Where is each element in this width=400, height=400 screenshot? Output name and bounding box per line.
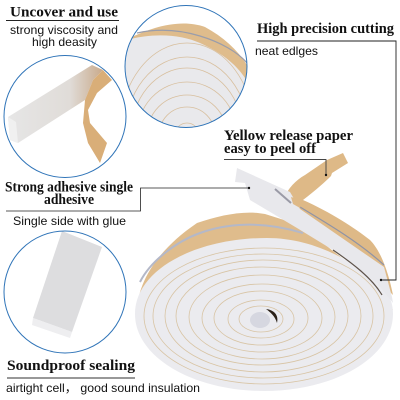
roll: white foam face (135, 238, 393, 391)
leader line: precision (257, 41, 396, 280)
circle: magnified roll edge (124, 5, 248, 128)
product: foam tape roll (135, 153, 393, 391)
text: strong viscosity: strong viscosity and (10, 23, 118, 37)
heading: easy to peel: easy to peel off (224, 141, 316, 157)
heading: high precision: High precision cutting (257, 21, 395, 37)
heading: soundproof: Soundproof sealing (7, 358, 136, 374)
rising tape: tan release paper (283, 153, 393, 295)
leader line: adhesive (6, 188, 249, 211)
leader line: release paper (224, 160, 326, 175)
rising tape: white foam strip (235, 168, 393, 303)
roll: centre hole (250, 312, 270, 328)
heading: yellow release paper: Yellow release paper (224, 128, 354, 144)
heading: strong adhesive: Strong adhesive single (5, 180, 134, 196)
text: single side: Single side with glue (13, 214, 126, 228)
circle: strip with peeled paper (4, 56, 126, 178)
text: high density: high deasity (32, 35, 97, 49)
text: airtight cell: airtight cell， good sound insulation (6, 381, 200, 395)
heading: adhesive second line: adhesive (44, 192, 95, 208)
heading: uncover and use: Uncover and use (10, 4, 119, 20)
roll: spiral rings (144, 248, 384, 384)
text: neat edges: neat edlges (255, 44, 318, 58)
circle: foam strip surface (4, 231, 126, 353)
roll: tan backing (137, 213, 393, 315)
